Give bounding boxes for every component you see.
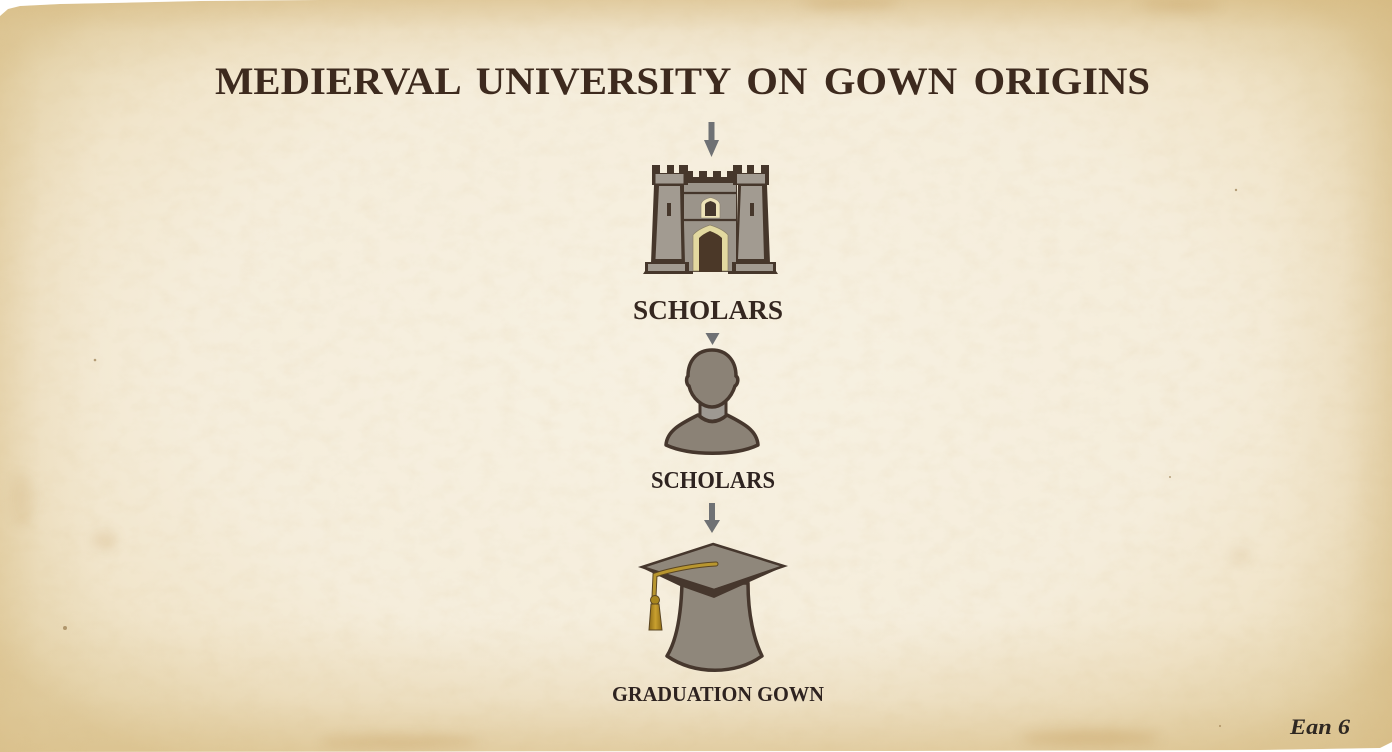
castle bases (643, 262, 778, 274)
castle central wall (682, 171, 737, 272)
icon: graduation cap (640, 544, 785, 670)
head (687, 350, 738, 407)
label: scholars (castle): SCHOLARS (633, 295, 783, 325)
castle right tower (733, 165, 770, 263)
label: graduation gown: GRADUATION GOWN (612, 682, 824, 706)
mortarboard front edge (640, 566, 785, 598)
icon: scholar bust (666, 350, 758, 453)
castle window (701, 198, 720, 218)
arrow: title to castle (704, 122, 719, 157)
shoulders (666, 415, 758, 453)
tassel (649, 596, 662, 630)
castle gate (693, 225, 728, 272)
castle left tower (651, 165, 688, 263)
arrow: small triangle (706, 333, 720, 345)
mortarboard (642, 544, 784, 590)
neck (700, 402, 726, 421)
tassel cord (654, 564, 716, 597)
signature: Ean 6 (1289, 714, 1350, 739)
label: scholars (bust): SCHOLARS (651, 467, 775, 494)
title: MEDIERVAL UNIVERSITY ON GOWN ORIGINS (215, 59, 1150, 103)
icon: castle (643, 165, 778, 274)
gown body (667, 583, 762, 670)
arrow: scholars to cap (704, 503, 720, 533)
